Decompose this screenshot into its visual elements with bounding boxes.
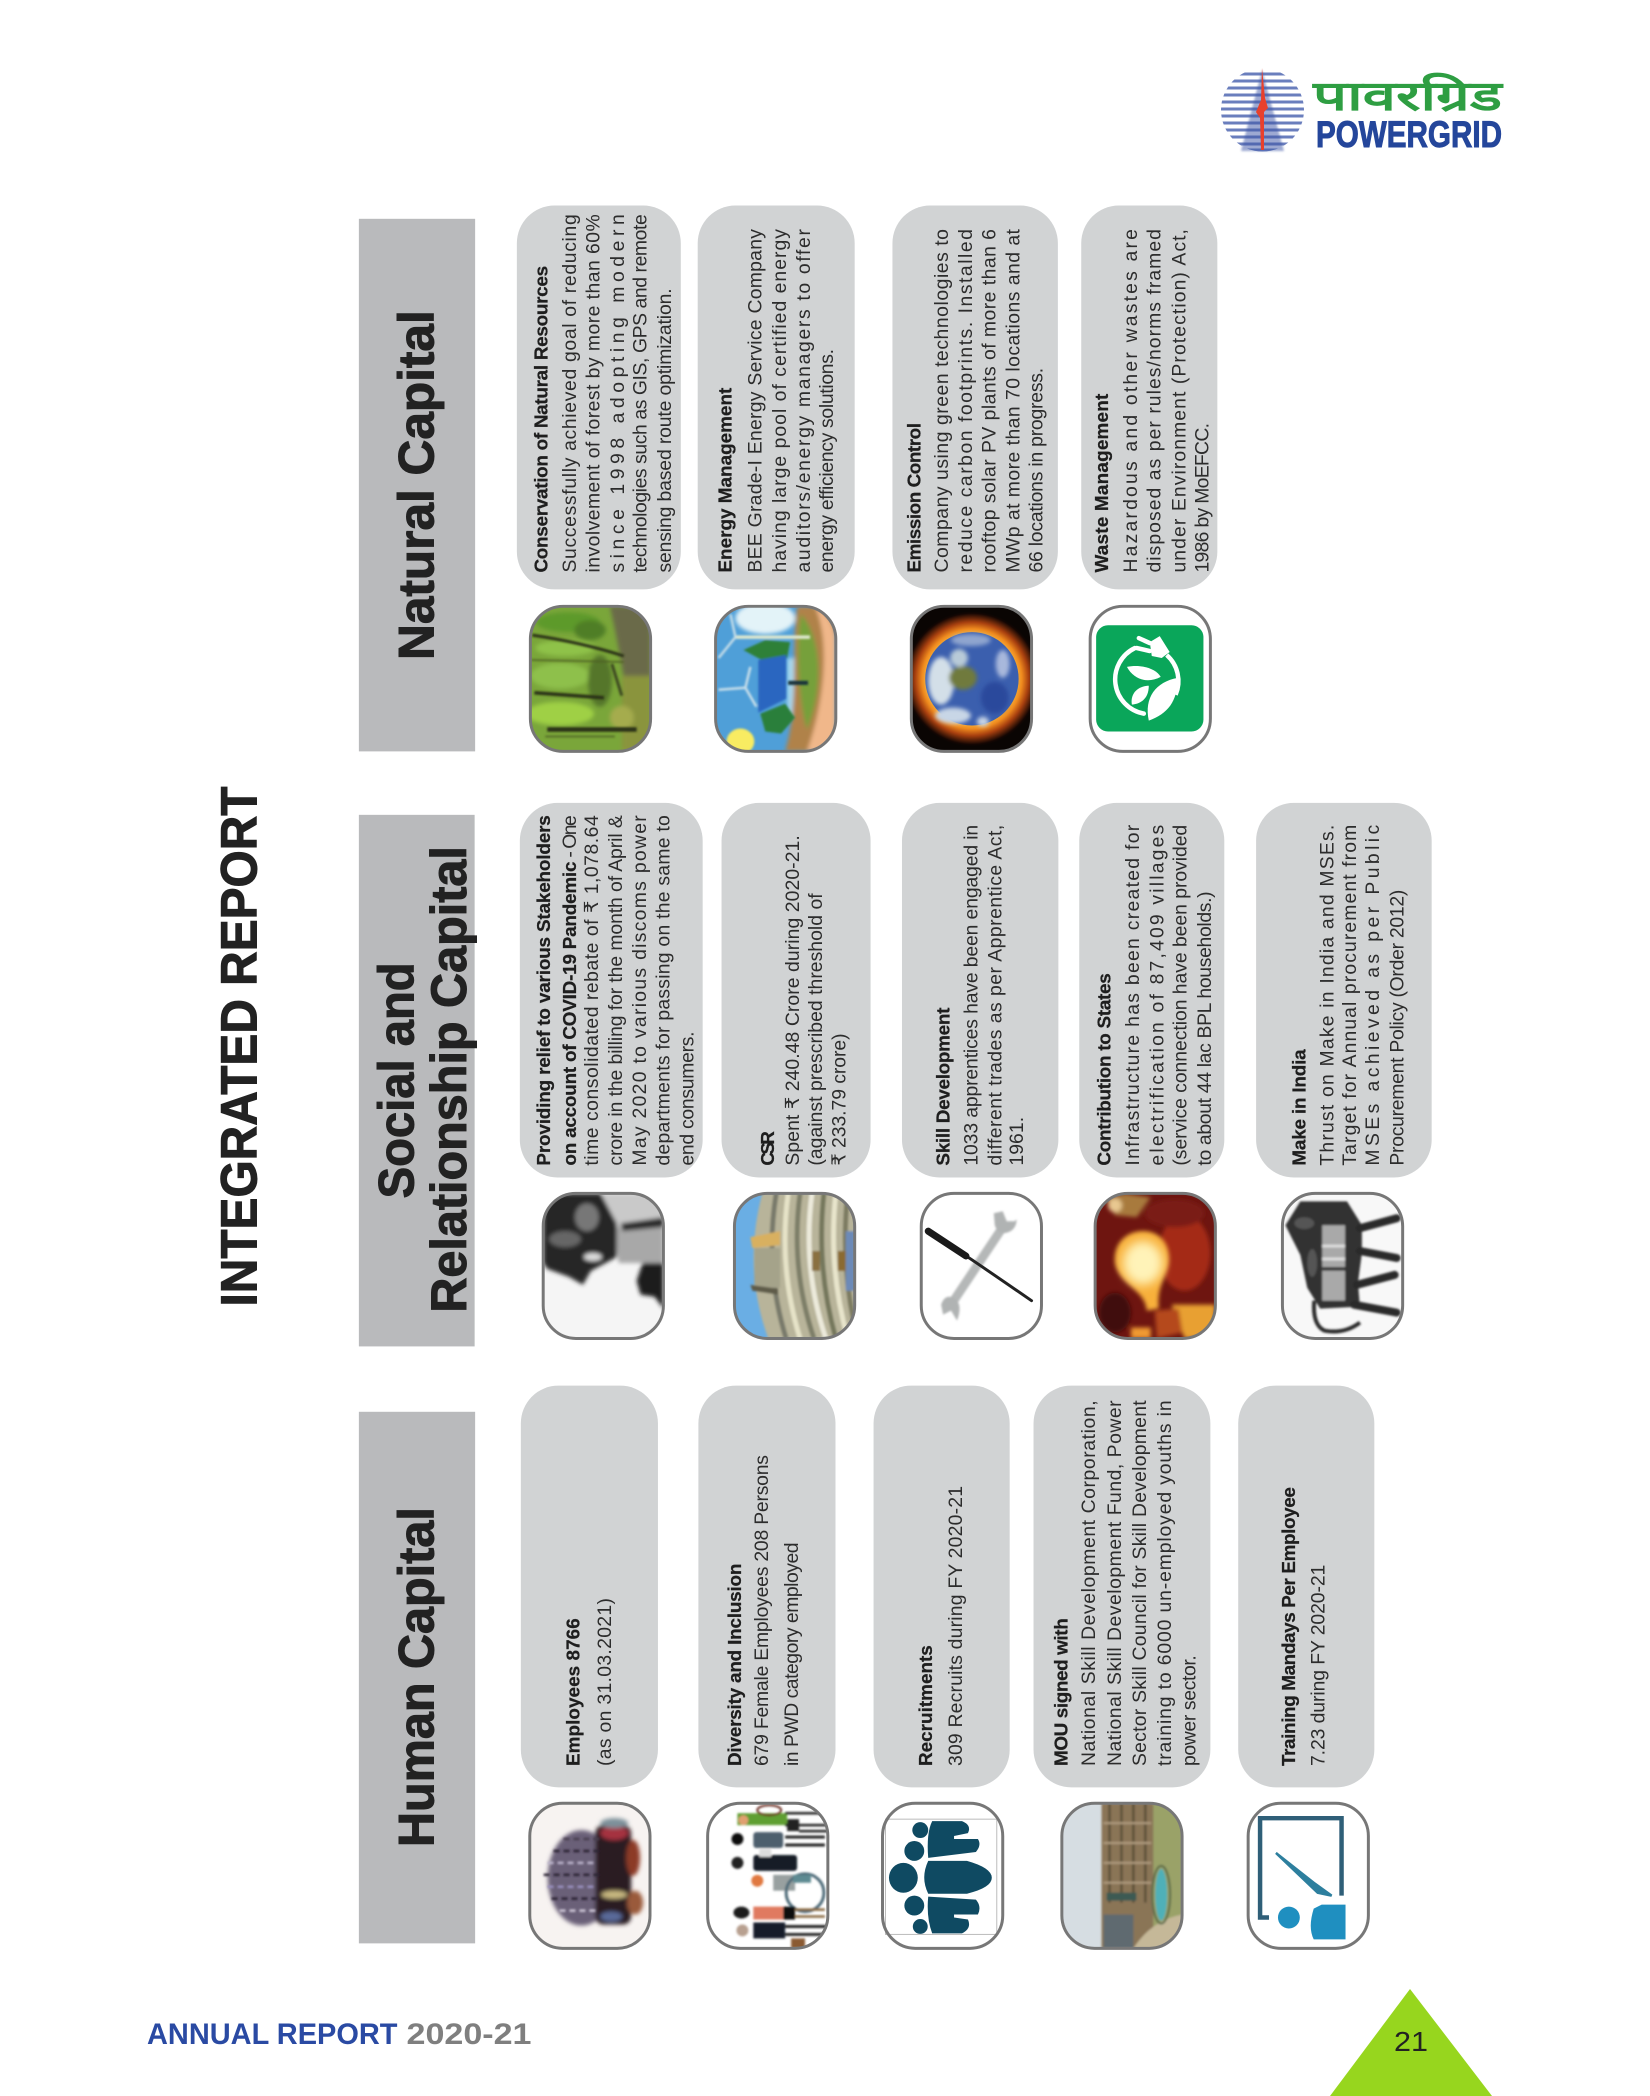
card: recruitments	[874, 1386, 1010, 1787]
icon: globe with transmission tower	[1220, 68, 1305, 151]
card: emission control: Emission Control	[903, 423, 924, 573]
icon: corporate building	[734, 1193, 858, 1338]
card: make in India: Make in India	[1289, 1049, 1310, 1166]
card: waste management: Hazardous and other wastes are	[1120, 229, 1142, 573]
card: relief during COVID-19: departments for passing on the same to	[652, 815, 674, 1166]
card: conservation of natural resources: technologies such as GIS, GPS and remote	[630, 214, 652, 573]
card: relief during COVID-19: time consolidated rebate of ₹ 1,078.64	[581, 815, 603, 1166]
logo wordmark: POWERGRID: POWERGRID	[1316, 114, 1502, 155]
card: relief during COVID-19: crore in the billing for the month of April &	[605, 815, 627, 1166]
heading bar: Human Capital: Human Capital	[388, 1507, 444, 1847]
card: waste management	[1081, 206, 1217, 589]
card: conservation of natural resources	[517, 206, 681, 589]
card: MOU signed: National Skill Development Fund, Power	[1104, 1400, 1126, 1766]
icon: diverse employees	[708, 1803, 828, 1948]
card: MOU signed: Sector Skill Council for Skill Development	[1129, 1400, 1151, 1766]
page number triangle: 21	[1394, 2026, 1428, 2057]
heading bar: Human Capital	[359, 1412, 475, 1943]
card: contribution to states: Contribution to States	[1094, 973, 1115, 1166]
card: emission control: 66 locations in progress.	[1025, 368, 1047, 573]
footer: annual report label	[147, 2018, 532, 2051]
icon: pen and wrench	[921, 1193, 1041, 1338]
heading bar: Social and Relationship Capital: Relationship Capital	[421, 846, 477, 1313]
card: make in India: Target for Annual procurement from	[1339, 825, 1361, 1166]
icon: renewable energy	[716, 602, 836, 754]
card: training mandays: Training Mandays Per Employee	[1278, 1487, 1299, 1766]
card: energy management: BEE Grade-I Energy Service Company	[744, 229, 766, 573]
card: CSR: (against prescribed threshold of	[805, 893, 827, 1166]
logo: POWERGRID	[1220, 68, 1504, 155]
card: CSR: Spent ₹ 240.48 Crore during 2020-21.	[782, 835, 804, 1166]
icon: recruits group	[883, 1803, 1003, 1948]
icon: earth with glowing ring	[911, 606, 1032, 751]
card: skill development: different trades as per Apprentice Act,	[985, 825, 1007, 1166]
card: relief during COVID-19: on account of COVID-19 Pandemic	[559, 862, 580, 1166]
title: INTEGRATED REPORT: INTEGRATED REPORT	[211, 786, 268, 1306]
card: waste management: 1986 by MoEFCC.	[1191, 423, 1213, 573]
icon: trainer at board	[1248, 1803, 1368, 1948]
card: MOU signed	[1034, 1386, 1210, 1787]
card: MOU signed: National Skill Development Corporation,	[1078, 1400, 1100, 1766]
card: recruitments: Recruitments	[915, 1645, 936, 1766]
panel: natural capital	[359, 206, 1217, 754]
card: emission control: Company using green technologies to	[931, 229, 953, 573]
icon: make in India lion	[1282, 1193, 1403, 1338]
icon: employees group photo	[530, 1803, 650, 1948]
icon: forest	[526, 606, 651, 751]
card: energy management	[698, 206, 855, 589]
card: skill development: 1961.	[1006, 1117, 1028, 1166]
card: waste management: Waste Management	[1091, 393, 1112, 573]
card: emission control	[892, 206, 1058, 589]
card: relief during COVID-19: May 2020 to various discoms power	[629, 815, 651, 1166]
icon: greyscale stakeholders photo	[543, 1193, 663, 1338]
heading bar: Social and Relationship Capital	[359, 815, 477, 1346]
card: contribution to states	[1079, 803, 1224, 1178]
icon: green plug and leaves	[1090, 606, 1210, 751]
card: relief during COVID-19: Providing relief to various Stakeholders	[533, 815, 554, 1166]
card: conservation of natural resources: Successfully achieved goal of reducing	[559, 214, 581, 573]
card: make in India: Thrust on Make in India and MSEs.	[1317, 825, 1339, 1166]
icon: campus building	[1062, 1803, 1182, 1948]
card: diversity and inclusion: 679 Female Employees 208 Persons	[751, 1455, 773, 1766]
footer: annual report label: ANNUAL REPORT	[147, 2018, 398, 2051]
card: energy management: Energy Management	[714, 387, 735, 573]
page number triangle	[1330, 1989, 1492, 2096]
panel: social and relationship capital	[359, 803, 1432, 1346]
panel: human capital	[359, 1386, 1374, 1948]
card: CSR	[722, 803, 871, 1178]
card: emission control: MWp at more than 70 locations and at	[1002, 228, 1024, 573]
card: waste management: under Environment (Protection) Act,	[1169, 229, 1191, 573]
card: relief during COVID-19: end consumers.	[677, 1031, 699, 1166]
card: MOU signed: training to 6000 un-employed youths in	[1154, 1400, 1176, 1766]
card: MOU signed: MOU signed with	[1050, 1618, 1071, 1766]
card: conservation of natural resources: involvement of forest by more than 60%	[583, 214, 605, 573]
card: contribution to states: to about 44 lac BPL households.)	[1194, 891, 1216, 1166]
card: diversity and inclusion: Diversity and Inclusion	[724, 1564, 745, 1766]
card: employees	[521, 1386, 658, 1787]
card: training mandays	[1238, 1386, 1374, 1787]
card: skill development: 1033 apprentices have been engaged in	[961, 825, 983, 1166]
card: make in India	[1256, 803, 1432, 1178]
card: energy management: having large pool of certified energy	[769, 229, 791, 573]
card: contribution to states: (service connection have been provided	[1170, 825, 1192, 1166]
icon: glowing light bulb	[1095, 1193, 1215, 1338]
card: diversity and inclusion	[698, 1386, 836, 1787]
card: energy management: auditors/energy managers to offer	[793, 229, 815, 573]
card: employees: (as on 31.03.2021)	[594, 1598, 616, 1766]
card: waste management: disposed as per rules/norms framed	[1144, 229, 1166, 573]
card: recruitments: 309 Recruits during FY 2020-21	[945, 1486, 967, 1766]
heading bar: Natural Capital: Natural Capital	[388, 310, 444, 660]
card: emission control: rooftop solar PV plants of more than 6	[978, 229, 1000, 573]
card: conservation of natural resources: since 1998 adopting modern	[607, 214, 629, 573]
card: relief during COVID-19: - One	[559, 815, 581, 858]
card: CSR: CSR	[757, 1131, 778, 1166]
logo wordmark: Hindi: पावरग्रिड	[1312, 72, 1504, 119]
card: conservation of natural resources: Conservation of Natural Resources	[531, 266, 552, 573]
card: energy management: energy efficiency solutions.	[816, 349, 838, 573]
card: skill development	[902, 803, 1058, 1178]
heading bar: Natural Capital	[359, 219, 475, 751]
card: emission control: reduce carbon footprints. Installed	[955, 229, 977, 573]
card: training mandays: 7.23 during FY 2020-21	[1308, 1565, 1330, 1766]
card: MOU signed: power sector.	[1178, 1655, 1200, 1766]
card: skill development: Skill Development	[933, 1007, 954, 1166]
card: contribution to states: electrification of 87,409 villages	[1146, 825, 1168, 1166]
card: relief during COVID-19	[520, 803, 703, 1178]
card: diversity and inclusion: in PWD category employed	[781, 1542, 803, 1766]
card: employees: Employees 8766	[562, 1618, 583, 1766]
footer: annual report label: 2020-21	[406, 2018, 532, 2051]
card: contribution to states: Infrastructure has been created for	[1122, 824, 1144, 1166]
card: CSR: ₹ 233.79 crore)	[829, 1033, 851, 1166]
card: make in India: MSEs achieved as per Public	[1362, 824, 1384, 1166]
heading bar: Social and Relationship Capital: Social and	[369, 962, 425, 1198]
card: make in India: Procurement Policy (Order 2012)	[1387, 890, 1409, 1166]
card: conservation of natural resources: sensing based route optimization.	[654, 288, 676, 573]
